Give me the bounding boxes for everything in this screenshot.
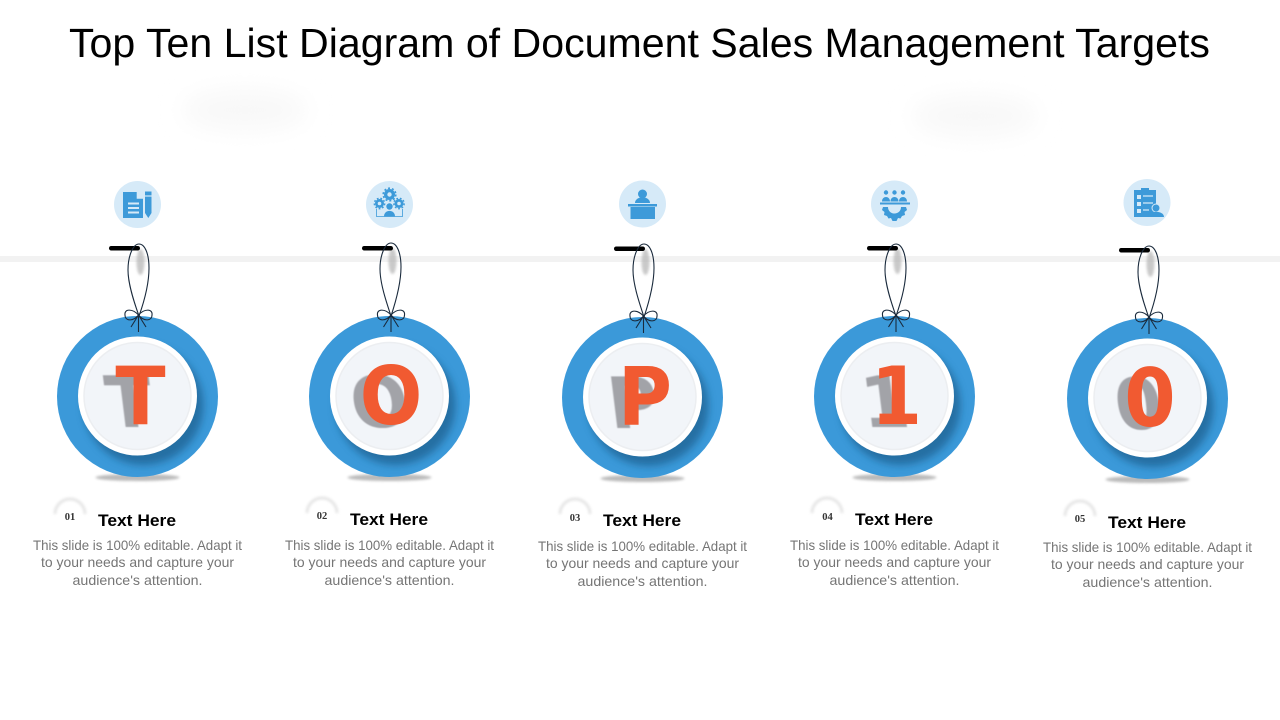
number badge 03 [560,499,590,524]
description: This slide is 100% editable. Adapt it [33,537,242,553]
description [285,537,494,588]
description: This slide is 100% editable. Adapt it [538,538,747,554]
description: to your needs and capture your [41,554,234,570]
heading: Text Here [1108,513,1186,532]
description: This slide is 100% editable. Adapt it [790,537,999,553]
description: to your needs and capture your [1051,556,1244,572]
description [33,537,242,588]
number badge 03: 03 [570,513,580,524]
description: audience's attention. [324,572,454,588]
horizontal hanging line [0,256,1280,262]
description: audience's attention. [1082,574,1212,590]
medallion [57,316,218,481]
column 4: 1 [790,180,999,588]
number badge 04: 04 [822,512,834,523]
column 3: P [538,180,747,589]
bow [125,310,152,332]
number badge 01: 01 [65,512,75,523]
bow [882,310,910,332]
icon: team and gear [871,180,918,228]
heading: Text Here [350,510,428,529]
number badge 02: 02 [317,511,327,522]
description: audience's attention. [578,573,708,589]
icon: presenter at desk [619,180,666,228]
description [790,537,999,588]
blurred smudge right [913,96,1037,136]
number badge 05: 05 [1075,514,1085,525]
description: This slide is 100% editable. Adapt it [285,537,494,553]
hanger: pin and string [867,244,906,316]
heading: Text Here [98,511,176,530]
medallion: P [603,364,663,445]
medallion [814,316,975,481]
heading: Text Here [855,510,933,529]
icon: checklist and person [1124,179,1170,226]
description: audience's attention. [830,572,960,588]
column 1: T [33,181,242,588]
bow [377,310,405,332]
medallion: 1 [871,351,922,444]
description: to your needs and capture your [293,554,486,570]
description: This slide is 100% editable. Adapt it [1043,539,1252,555]
medallion: O [360,351,422,444]
hanger: pin and string [614,244,654,317]
description: audience's attention. [72,572,202,588]
hanger: pin and string [362,243,401,316]
description: to your needs and capture your [798,554,991,570]
number badge 02 [307,498,337,522]
medallion: P [618,352,672,445]
number badge 05 [1065,501,1095,525]
bow [630,311,657,333]
description [538,538,747,589]
column 2: O [285,181,494,588]
bow [1135,312,1163,334]
number badge 01 [55,499,85,523]
hanger: pin and string [109,244,149,316]
medallion [562,317,723,482]
medallion: T [101,363,158,444]
number badge 04 [812,498,842,523]
medallion: T [115,351,166,444]
description [1043,539,1252,590]
blurred smudge left [183,90,307,130]
column 5: 0 [1043,179,1252,590]
icon: document and pencil [114,181,161,228]
medallion: O [346,363,414,444]
medallion: 0 [1110,365,1167,446]
description: to your needs and capture your [546,555,739,571]
hanger: pin and string [1119,246,1159,318]
medallion: 0 [1124,353,1176,446]
medallion [1067,318,1228,483]
icon: gears and person [366,181,413,228]
heading: Text Here [603,511,681,530]
medallion: 1 [857,363,914,444]
medallion [309,316,470,481]
title: Top Ten List Diagram of Document Sales Management Targets [69,20,1210,66]
